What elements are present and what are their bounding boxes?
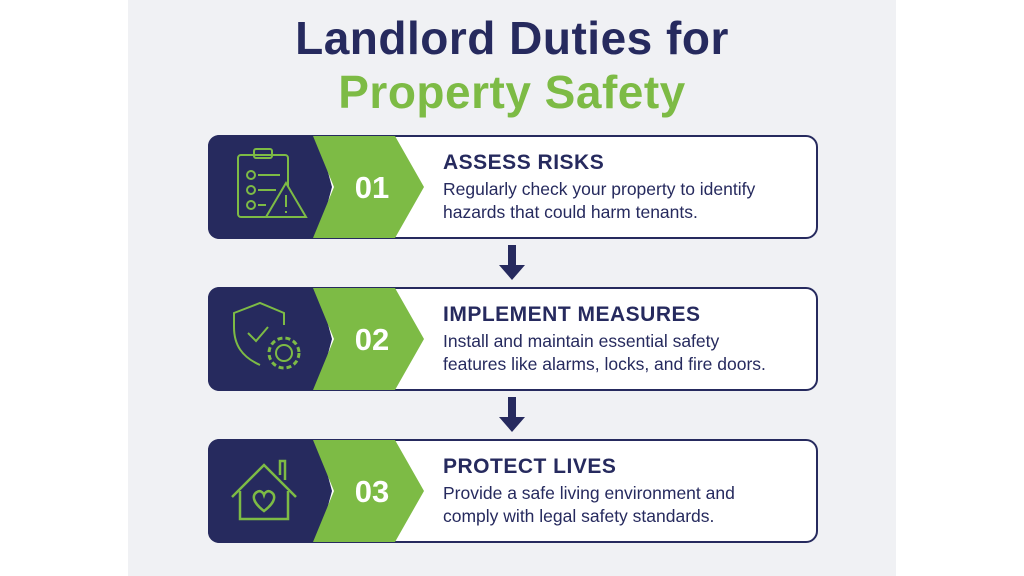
card 1: assess risks: Regularly check your property to identify bbox=[443, 179, 755, 199]
card 1: assess risks: ASSESS RISKS bbox=[443, 151, 604, 174]
card 2: implement measures bbox=[208, 287, 818, 391]
arrow 1 bbox=[499, 245, 525, 280]
card 2: implement measures: 02 bbox=[355, 322, 389, 357]
card 1: assess risks bbox=[208, 135, 818, 239]
card 1: assess risks: hazards that could harm tenants. bbox=[443, 202, 698, 222]
card 1: assess risks: 01 bbox=[355, 170, 389, 205]
card 3: protect lives: 03 bbox=[355, 474, 389, 509]
card 3: protect lives: Provide a safe living environment and bbox=[443, 483, 735, 503]
card 3: protect lives bbox=[208, 439, 818, 543]
card 3: protect lives: PROTECT LIVES bbox=[443, 455, 616, 478]
card 3: protect lives: comply with legal safety standards. bbox=[443, 506, 714, 526]
arrow 2 bbox=[499, 397, 525, 432]
card 2: implement measures: Install and maintain essential safety bbox=[443, 331, 719, 351]
subtitle: Property Safety bbox=[338, 66, 686, 118]
card 2: implement measures: features like alarms, locks, and fire doors. bbox=[443, 354, 766, 374]
card 2: implement measures: IMPLEMENT MEASURES bbox=[443, 303, 701, 326]
title: Landlord Duties for bbox=[295, 12, 729, 64]
